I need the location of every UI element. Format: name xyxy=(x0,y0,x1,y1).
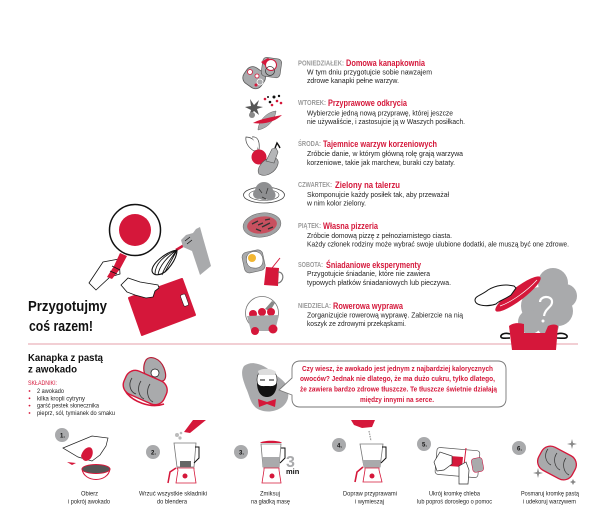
caption 3: na gładką masę xyxy=(251,498,290,506)
caption 6: i udekoruj warzywem xyxy=(523,498,576,506)
text: Thursday: Skomponujcie każdy posiłek tak, aby przeważał xyxy=(307,190,449,199)
icon: pizza xyxy=(242,210,282,240)
illustration: bearded chef xyxy=(242,363,288,412)
icon: sandwiches xyxy=(240,57,282,92)
text: Tuesday: Przyprawowe odkrycia xyxy=(328,98,408,109)
text: Tuesday: Wybierzcie jedną nową przyprawę, której jeszcze xyxy=(307,108,453,118)
text: Wednesday xyxy=(298,139,463,167)
ingredients list: 2 awokado xyxy=(37,388,64,395)
caption 1: i pokrój awokado xyxy=(68,498,110,506)
caption 1 xyxy=(68,490,110,506)
speech bubble: avocado fact: że zawiera bardzo zdrowe tłuszcze. Te tłuszcze świetnie działają xyxy=(300,384,498,394)
text: Tuesday: WTOREK: xyxy=(298,100,326,107)
step 1: peel and cut avocado: 1. xyxy=(60,434,65,440)
illustration: halved avocado xyxy=(120,358,170,408)
text: Saturday: Śniadaniowe eksperymenty xyxy=(326,259,422,271)
step 3: blend 3 minutes xyxy=(234,441,300,483)
text: Sunday: Zorganizujcie rowerową wyprawę. Zabierzcie na nią xyxy=(307,310,463,320)
text: Saturday: typowych płatków śniadaniowych lub pieczywa. xyxy=(307,278,451,287)
text: Monday: zdrowe kanapki pełne warzyw. xyxy=(307,76,399,85)
icon: spices xyxy=(245,95,282,130)
caption 3 xyxy=(251,490,290,506)
heading: Kanapka z pastą z awokado: Kanapka z pastą xyxy=(28,352,103,364)
caption 5: lub poproś dorosłego o pomoc xyxy=(417,498,493,506)
text: Thursday xyxy=(298,180,449,208)
speech bubble: avocado fact xyxy=(279,361,506,407)
heading: Przygotujmy coś razem: Przygotujmy xyxy=(28,298,108,315)
text: Sunday xyxy=(298,301,463,328)
caption 4: Dopraw przyprawami xyxy=(343,490,397,498)
text: Wednesday: Tajemnice warzyw korzeniowych xyxy=(323,139,437,150)
step 1: peel and cut avocado xyxy=(55,428,110,480)
step 6: spread paste on bread: 6. xyxy=(517,446,522,452)
speech bubble: avocado fact: owoców? Jednak nie dlatego, że ma dużo cukru, tylko dlatego, xyxy=(300,374,495,383)
step 5: cut a slice of bread: 5. xyxy=(422,442,427,448)
caption 2: Wrzuć wszystkie składniki xyxy=(139,490,207,498)
heading: Przygotujmy coś razem xyxy=(28,298,108,335)
ingredients list: pieprz, sól, tymianek do smaku xyxy=(37,410,115,417)
text: Monday: W tym dniu przygotujcie sobie nawzajem xyxy=(307,68,432,76)
text: Wednesday: ŚRODA: xyxy=(298,139,321,148)
step 3: blend 3 minutes: 3 xyxy=(286,454,295,471)
icon: egg toast and juice xyxy=(241,249,283,286)
speech bubble: avocado fact: między innymi na serce. xyxy=(360,395,434,404)
illustration: steaming pot with lid xyxy=(475,268,577,350)
text: Tuesday xyxy=(298,98,465,126)
ingredients list xyxy=(28,380,115,417)
ingredients list: SKŁADNIKI: xyxy=(28,380,57,387)
text: Friday: Każdy członek rodziny może wybrać swoje ulubione dodatki, ale muszą być one zdrowe. xyxy=(307,240,569,248)
caption 4: i wymieszaj xyxy=(355,498,384,506)
heading: Kanapka z pastą z awokado xyxy=(28,352,103,376)
step 2: blender with ingredients xyxy=(146,420,206,483)
text: Saturday xyxy=(298,259,451,287)
caption 5 xyxy=(417,490,493,506)
text: Thursday: CZWARTEK: xyxy=(298,182,332,189)
icon: broccoli on plate xyxy=(244,182,284,203)
text: Saturday: Przygotujcie śniadanie, które nie zawiera xyxy=(307,269,430,278)
text: Monday: PONIEDZIAŁEK: xyxy=(298,60,344,68)
text: Thursday: Zielony na talerzu xyxy=(335,180,400,191)
text: Sunday: NIEDZIELA: xyxy=(298,303,331,310)
text: Thursday: w nim kolor zielony. xyxy=(306,198,366,208)
text: Wednesday: korzeniowe, takie jak marchew, buraki czy bataty. xyxy=(307,158,455,167)
caption 6: Posmaruj kromkę pastą xyxy=(521,490,579,498)
step 2: blender with ingredients: 2. xyxy=(151,450,156,456)
caption 5: Ukrój kromkę chleba xyxy=(429,490,480,498)
speech bubble: avocado fact: Czy wiesz, że awokado jest jednym z najbardziej kalorycznych xyxy=(302,364,493,373)
heading: Przygotujmy coś razem: coś razem! xyxy=(29,318,93,335)
caption 3: Zmiksuj xyxy=(260,490,280,498)
caption 2: do blendera xyxy=(157,498,187,506)
ingredients list: garść pestek słonecznika xyxy=(37,403,99,410)
caption 1: Obierz xyxy=(81,490,98,498)
step 4: season and mix xyxy=(332,420,386,482)
icon: root vegetables xyxy=(246,137,280,175)
step 3: blend 3 minutes: min xyxy=(286,467,300,476)
illustration: frying pan with hand xyxy=(89,204,160,290)
text: Friday: PIĄTEK: xyxy=(298,223,321,230)
icon: bicycle basket xyxy=(246,296,279,335)
step 4: season and mix: 4. xyxy=(337,444,342,450)
caption 4 xyxy=(343,490,397,506)
text: Wednesday: Zróbcie danie, w którym główną rolę grają warzywa xyxy=(307,149,463,158)
text: Tuesday: nie używaliście, i zastosujcie ją w Waszych posiłkach. xyxy=(307,117,465,126)
ingredients list: kilka kropli cytryny xyxy=(37,395,86,402)
illustration: whisk with grey hand xyxy=(152,227,211,275)
step 5: cut a slice of bread xyxy=(417,437,484,484)
text: Friday: Zróbcie domową pizzę z pełnoziarnistego ciasta. xyxy=(307,231,452,240)
text: Sunday: Rowerowa wyprawa xyxy=(333,301,404,312)
step 3: blend 3 minutes: 3. xyxy=(239,450,244,456)
text: Saturday: SOBOTA: xyxy=(298,262,323,269)
caption 6 xyxy=(521,490,579,506)
text: Friday xyxy=(298,221,569,248)
text: Monday xyxy=(298,58,432,85)
text: Sunday: koszyk ze zdrowymi przekąskami. xyxy=(307,319,406,328)
text: Friday: Własna pizzeria xyxy=(323,221,379,232)
text: Monday: Domowa kanapkownia xyxy=(346,58,426,69)
caption 2 xyxy=(139,490,207,506)
heading: Kanapka z pastą z awokado: z awokado xyxy=(28,364,77,376)
step 6: spread paste on bread xyxy=(512,439,580,485)
illustration: red cutting board with hand xyxy=(121,278,195,335)
